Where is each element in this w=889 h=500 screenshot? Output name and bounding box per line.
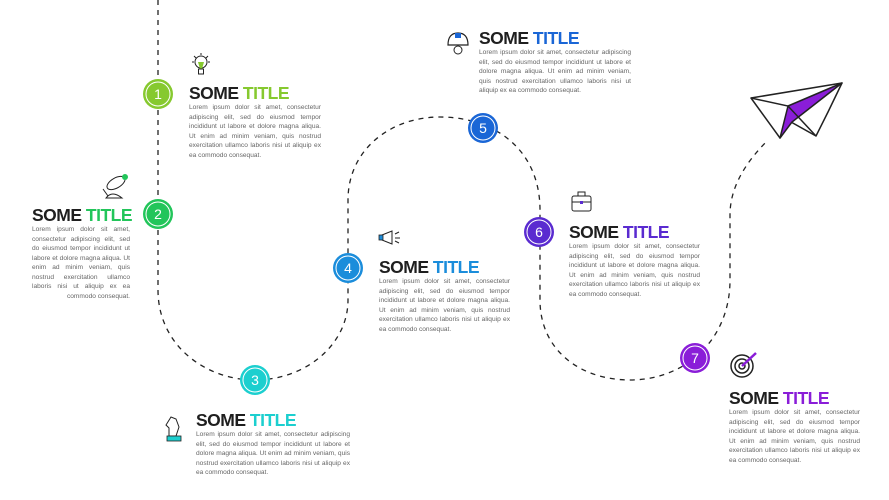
block 3 — [196, 410, 350, 476]
block 7: Lorem ipsum dolor sit amet, consectetur adipiscing elit, sed do eiusmod tempor incididunt ut labore et dolore magna aliqua. Ut enim ad minim veniam, quis nostrud exercitation ullamco laboris nisi ut aliquip ex ea commodo consequat. — [729, 409, 860, 464]
block 2: Lorem ipsum dolor sit amet, consectetur adipiscing elit, sed do eiusmod tempor incididunt ut labore et dolore magna aliqua. Ut enim ad minim veniam, quis nostrud exercitation ullamco laboris nisi ut aliquip ex ea commodo consequat. — [32, 226, 130, 300]
marker 6: 6 — [535, 224, 543, 240]
marker 2: 2 — [154, 206, 162, 222]
icon: paper plane — [750, 82, 843, 139]
icon: megaphone — [378, 230, 400, 245]
block 6: SOME TITLE — [569, 222, 669, 242]
icon: helmet gear — [447, 32, 469, 54]
block 3: SOME TITLE — [196, 410, 296, 430]
block 5 — [479, 28, 631, 94]
icon: microscope — [102, 174, 128, 198]
marker 4 — [333, 253, 363, 283]
marker 3: 3 — [251, 372, 259, 388]
marker 6 — [524, 217, 554, 247]
marker 7: 7 — [691, 350, 699, 366]
marker 1: 1 — [154, 86, 162, 102]
icon: chess knight — [165, 416, 182, 442]
block 5: Lorem ipsum dolor sit amet, consectetur adipiscing elit, sed do eiusmod tempor incididunt ut labore et dolore magna aliqua. Ut enim ad minim veniam, quis nostrud exercitation ullamco laboris nisi ut aliquip ex ea commodo consequat. — [479, 49, 631, 94]
block 2: SOME TITLE — [32, 205, 132, 225]
marker 5: 5 — [479, 120, 487, 136]
block 3: Lorem ipsum dolor sit amet, consectetur adipiscing elit, sed do eiusmod tempor incididunt ut labore et dolore magna aliqua. Ut enim ad minim veniam, quis nostrud exercitation ullamco laboris nisi ut aliquip ex ea commodo consequat. — [196, 431, 350, 476]
icon: briefcase — [572, 192, 592, 212]
block 7: SOME TITLE — [729, 388, 829, 408]
marker 7 — [680, 343, 710, 373]
block 5: SOME TITLE — [479, 28, 579, 48]
block 6: Lorem ipsum dolor sit amet, consectetur adipiscing elit, sed do eiusmod tempor incididunt ut labore et dolore magna aliqua. Ut enim ad minim veniam, quis nostrud exercitation ullamco laboris nisi ut aliquip ex ea commodo consequat. — [569, 243, 700, 298]
block 4: Lorem ipsum dolor sit amet, consectetur adipiscing elit, sed do eiusmod tempor incididunt ut labore et dolore magna aliqua. Ut enim ad minim veniam, quis nostrud exercitation ullamco laboris nisi ut aliquip ex ea commodo consequat. — [379, 278, 510, 332]
block 1: Lorem ipsum dolor sit amet, consectetur adipiscing elit, sed do eiusmod tempor incididunt ut labore et dolore magna aliqua. Ut enim ad minim veniam, quis nostrud exercitation ullamco laboris nisi ut aliquip ex ea commodo consequat. — [189, 104, 321, 158]
block 4: SOME TITLE — [379, 257, 479, 277]
marker 5 — [468, 113, 498, 143]
marker 2 — [143, 199, 173, 229]
marker 4: 4 — [344, 260, 352, 276]
marker 3 — [240, 365, 270, 395]
icon: target — [730, 352, 757, 378]
marker 1 — [143, 79, 173, 109]
block 1: SOME TITLE — [189, 83, 289, 103]
icon: lightbulb — [192, 53, 210, 74]
